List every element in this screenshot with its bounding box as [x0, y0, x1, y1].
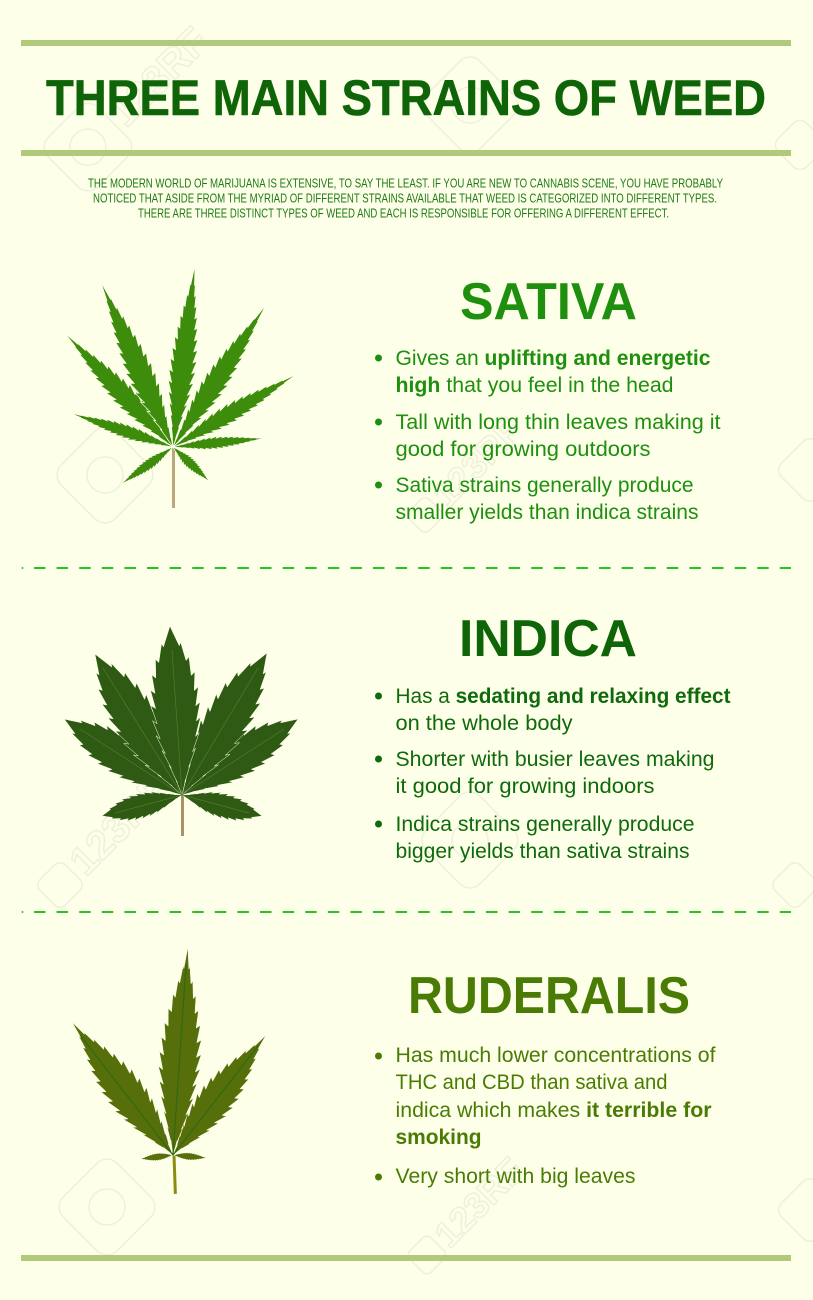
heading: indica: INDICA [459, 610, 637, 668]
watermark stamps: 123RF [426, 1150, 532, 1255]
sativa bullet list: Tall with long thin leaves making it [396, 410, 721, 434]
indica bullet list: Shorter with busier leaves making [396, 747, 714, 771]
sativa bullet list: Gives an uplifting and energetic [396, 346, 711, 370]
indica bullet list [375, 684, 730, 863]
indica bullet list: it good for growing indoors [396, 774, 654, 798]
panel: indica [53, 610, 730, 863]
sativa bullet list: high that you feel in the head [396, 373, 674, 397]
watermark stamps: 123RF [101, 19, 217, 135]
intro paragraph: THERE ARE THREE DISTINCT TYPES OF WEED AND EACH IS RESPONSIBLE FOR OFFERING A DIFFERENT EFFECT. [138, 206, 669, 220]
icon: indica leaf [53, 624, 309, 836]
indica bullet list: bigger yields than sativa strains [396, 839, 690, 863]
icon: sativa leaf [56, 264, 302, 508]
heading: sativa: SATIVA [460, 273, 637, 331]
sativa bullet list: Sativa strains generally produce [396, 473, 694, 497]
ruderalis bullet list: indica which makes it terrible for [396, 1098, 712, 1122]
ruderalis bullet list: Very short with big leaves [396, 1164, 636, 1188]
sativa bullet list: good for growing outdoors [396, 437, 650, 461]
header: title between rules [21, 40, 791, 156]
indica bullet list: Indica strains generally produce [396, 812, 694, 836]
watermark stamps: 123RF [424, 410, 530, 515]
ruderalis bullet list: THC and CBD than sativa and [396, 1070, 668, 1094]
ruderalis bullet list: smoking [396, 1125, 482, 1149]
ruderalis bullet list: Has much lower concentrations of [396, 1043, 716, 1067]
intro paragraph [88, 176, 724, 220]
indica bullet list: on the whole body [396, 711, 573, 735]
ruderalis bullet list [375, 1043, 716, 1188]
heading: ruderalis: RUDERALIS [408, 967, 690, 1025]
sativa bullet list [375, 346, 721, 524]
panel: sativa [56, 264, 721, 524]
sativa bullet list: smaller yields than indica strains [396, 500, 698, 524]
panel: ruderalis [56, 946, 716, 1194]
icon: ruderalis leaf [56, 946, 281, 1194]
indica bullet list: Has a sedating and relaxing effect [396, 684, 730, 708]
watermark stamps: 123RF [61, 768, 177, 884]
